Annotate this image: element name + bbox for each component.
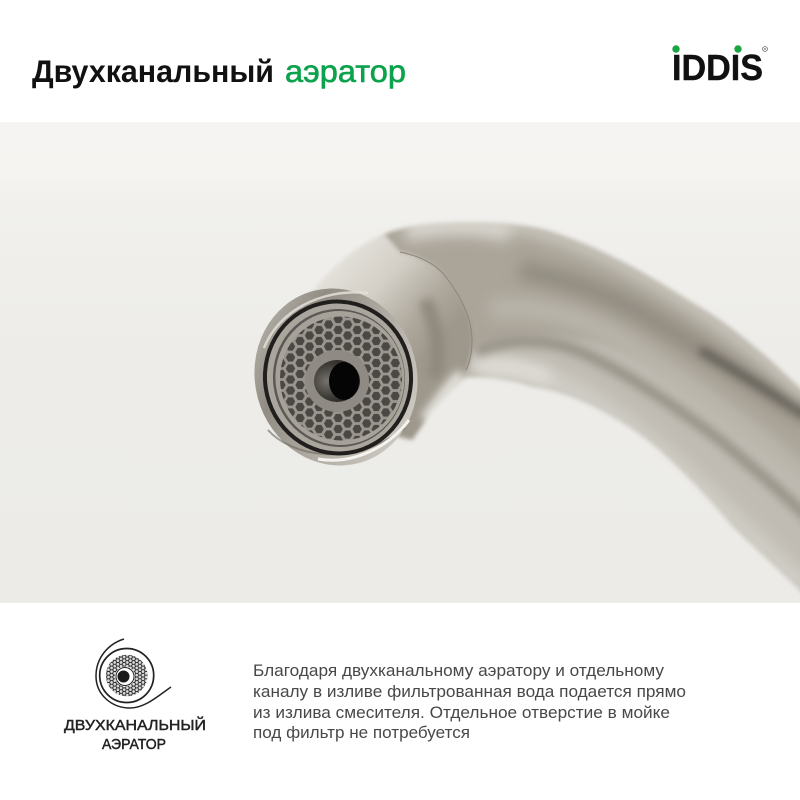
logo: IDDIS: IDDIS bbox=[672, 47, 763, 88]
honeycomb mesh bbox=[280, 316, 402, 440]
icon caption bbox=[64, 716, 206, 753]
title bbox=[32, 53, 406, 89]
description text: Благодаря двухканальному аэратору и отдельному bbox=[253, 661, 664, 680]
icon caption: АЭРАТОР bbox=[102, 736, 166, 753]
aerator bbox=[254, 288, 418, 466]
description text: из излива смесителя. Отдельное отверстие в мойке bbox=[253, 703, 670, 722]
icon: dual-channel aerator bbox=[96, 639, 171, 708]
central tube bbox=[305, 350, 369, 412]
description text: под фильтр не потребуется bbox=[253, 723, 470, 742]
panel: product photo bbox=[0, 122, 800, 610]
aerator dark groove bbox=[262, 300, 414, 456]
aerator outer ring bbox=[266, 304, 410, 452]
aerator metal rim bbox=[254, 288, 418, 466]
title: Двухканальный bbox=[32, 53, 274, 89]
faucet spout bbox=[313, 220, 800, 593]
description text bbox=[253, 661, 686, 742]
tube opening bbox=[329, 362, 359, 400]
description text: каналу в изливе фильтрованная вода подается прямо bbox=[253, 682, 686, 701]
spout seam bbox=[400, 252, 472, 370]
icon caption: ДВУХКАНАЛЬНЫЙ bbox=[64, 716, 206, 734]
title: аэратор bbox=[285, 53, 406, 89]
